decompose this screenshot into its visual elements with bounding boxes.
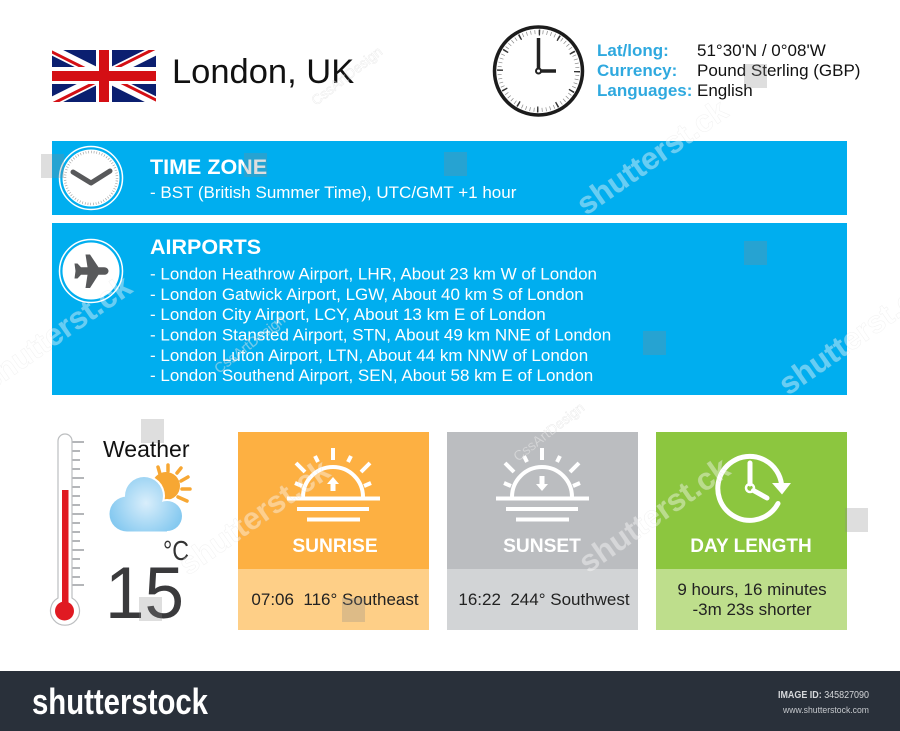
icon: local time clock [494, 27, 582, 115]
watermarks: shutterst.ck [572, 450, 737, 580]
label: sunset: SUNSET [503, 536, 581, 557]
list: airports: - London Southend Airport, SEN, About 58 km E of London [150, 366, 593, 385]
temperature value: 15 [105, 553, 184, 634]
text: day length values: 9 hours, 16 minutes [677, 580, 827, 599]
footer bar [0, 671, 900, 731]
watermarks: shutterst.ck [570, 92, 735, 222]
value: languages: English [697, 81, 753, 100]
icon: UK flag [52, 50, 156, 102]
list: airports: - London Stansted Airport, STN, About 49 km NNE of London [150, 326, 611, 344]
location facts [597, 41, 860, 100]
heading: weather: Weather [103, 436, 190, 462]
list: airports: - London Heathrow Airport, LHR, About 23 km W of London [150, 264, 597, 284]
panel: airports [52, 223, 847, 395]
list: airports [150, 264, 611, 385]
label: currency: Currency: [597, 61, 677, 80]
footer url: www.shutterstock.com [782, 705, 869, 716]
heading: time zone: TIME ZONE [150, 155, 267, 179]
icon: time zone clock [60, 146, 122, 210]
value: currency: Pound Sterling (GBP) [697, 61, 860, 80]
heading: airports: AIRPORTS [150, 235, 261, 259]
list: airports: - London Luton Airport, LTN, About 44 km NNW of London [150, 346, 588, 365]
watermarks [0, 92, 900, 582]
secondary watermarks [211, 43, 587, 464]
label: sunrise: SUNRISE [292, 536, 378, 557]
text: sunrise time and bearing: 07:06 116° Southeast [251, 590, 419, 609]
image id: IMAGE ID: 345827090 [778, 690, 869, 701]
title: London, UK [172, 53, 354, 91]
secondary watermarks: CssArtDesign [308, 43, 385, 108]
icon: cloud and sun [110, 465, 190, 533]
icon: thermometer [50, 434, 84, 625]
text: day length values: -3m 23s shorter [692, 600, 812, 619]
icon: sunrise [287, 448, 380, 520]
label: languages: Languages: [597, 81, 692, 100]
list: airports: - London City Airport, LCY, About 13 km E of London [150, 305, 546, 324]
secondary watermarks: CssArtDesign [510, 399, 587, 464]
text: day length values [677, 580, 827, 619]
watermark squares [41, 64, 868, 622]
panel: sunrise [238, 432, 429, 630]
watermarks: shutterst.ck [172, 452, 337, 582]
icon: day length clock [718, 456, 791, 520]
label: lat/long: Lat/long: [597, 41, 669, 60]
secondary watermarks: CssArtDesign [211, 311, 288, 376]
value: lat/long: 51°30'N / 0°08'W [697, 41, 826, 60]
icon: airplane [60, 240, 122, 302]
icon: sunset [496, 448, 589, 520]
panel: time zone [52, 141, 847, 215]
panel: day length [656, 432, 847, 630]
panel: sunset [447, 432, 638, 630]
footer logo: shutterstock [32, 681, 209, 722]
label: day length: DAY LENGTH [690, 536, 812, 557]
text: sunset time and bearing: 16:22 244° Southwest [458, 590, 630, 609]
list: airports: - London Gatwick Airport, LGW, About 40 km S of London [150, 285, 584, 304]
text: time zone details: - BST (British Summer Time), UTC/GMT +1 hour [150, 183, 517, 202]
unit: degrees celsius: °C [163, 535, 189, 566]
